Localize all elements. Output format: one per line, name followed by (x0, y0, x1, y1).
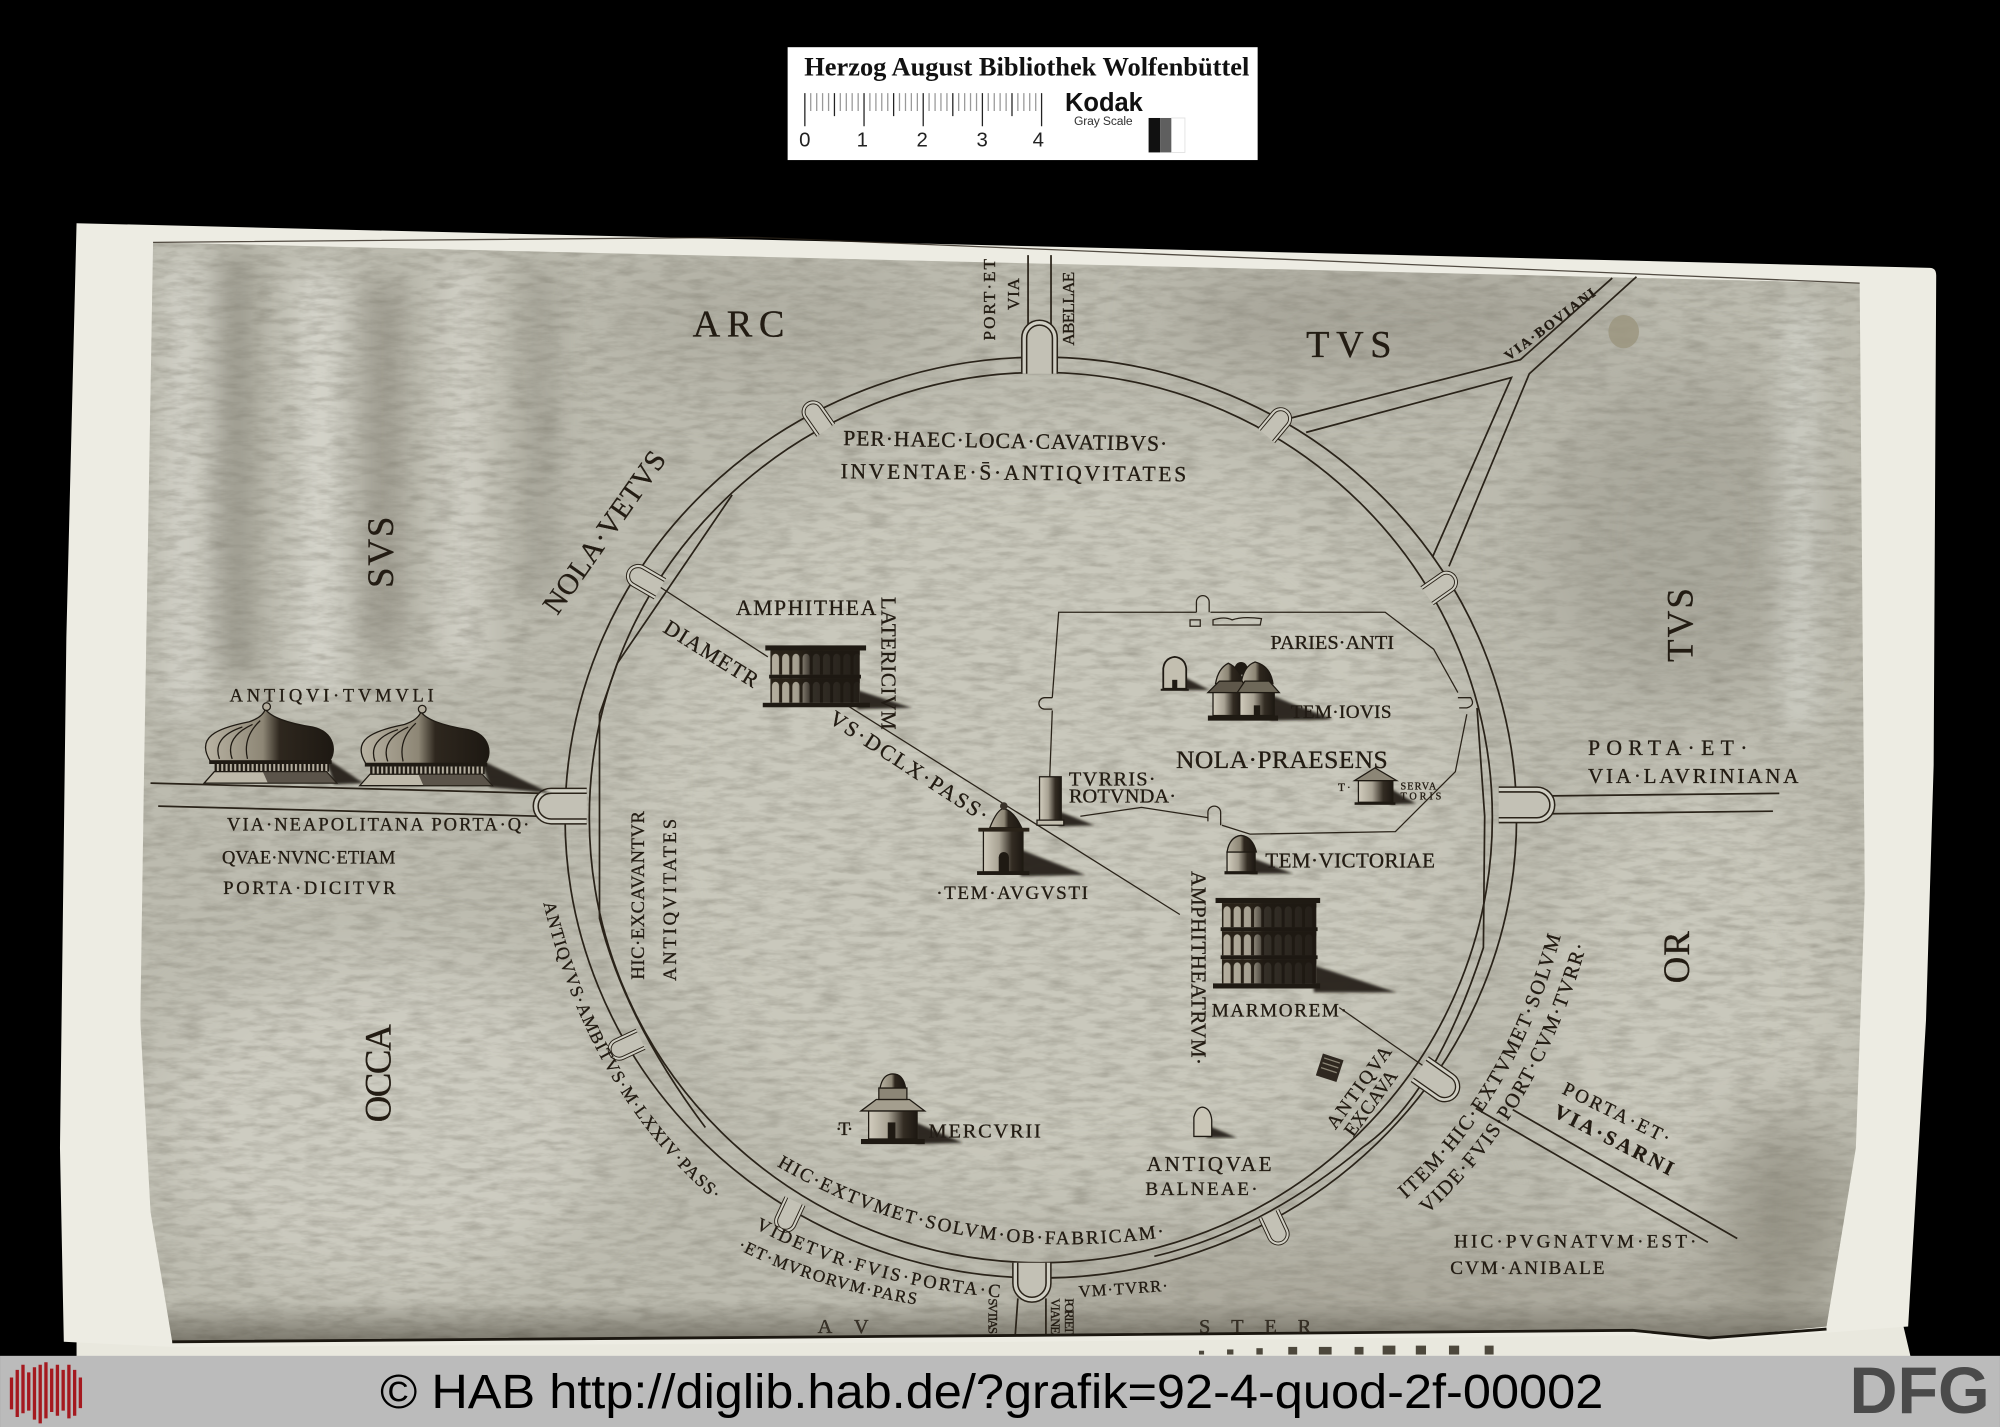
label: t mercurii (835, 1119, 1041, 1143)
label: amphithea: AMPHITHEA (736, 596, 877, 620)
label: turris rotunda (1069, 769, 1176, 807)
label: bottom road words: SVTIAS (986, 1298, 1000, 1334)
footer bar (0, 1354, 2000, 1427)
show-through text marks on lower page (1199, 1346, 1494, 1355)
label: antiqua excava: ANTIQVA (1323, 1042, 1397, 1133)
turris rotunda tower (1037, 777, 1094, 827)
label: hic pugnatum (1450, 1231, 1696, 1279)
label: antiquae balneae (1145, 1152, 1272, 1200)
label: tem victoriae: TEM·VICTORIAE (1265, 848, 1435, 872)
gate east (1499, 790, 1552, 820)
label: t serapis (1338, 782, 1442, 803)
curved label: item hic extumet: ITEM·HIC·EXTVMET·SOLVM (1397, 932, 1561, 1199)
compass word SVS: SVS (360, 517, 401, 588)
label: amphitheatrum: AMPHITHEATRVM· (1186, 871, 1210, 1065)
inner left wall line (600, 495, 732, 1128)
lower page of the open book (77, 1314, 1911, 1357)
tumulus 1 (204, 703, 364, 784)
compass word TVS east: TVS (1660, 588, 1701, 662)
via boviani and branch roads (1290, 277, 1636, 566)
plate tonal variation (128, 230, 1888, 1352)
label: nola vetus: NOLA·VETVS (537, 445, 673, 620)
label: diametrus part 1: DIAMETR (659, 615, 763, 693)
label: antiquae balneae: ANTIQVAE (1147, 1152, 1272, 1176)
inscription: per haec loca: INVENTAE·S̄·ANTIQVITATES (841, 459, 1186, 486)
label: porta et via laurinina (1588, 736, 1799, 788)
label: hic pugnatum: CVM·ANIBALE (1450, 1258, 1605, 1279)
compass word AV: AV (818, 1316, 869, 1338)
paries antiqua wall remnant (1190, 618, 1261, 626)
label: nola praesens: NOLA·PRAESENS (1176, 745, 1388, 774)
vertical streaks upper left (163, 255, 1814, 727)
label: bottom road words: VIANE (1048, 1298, 1062, 1334)
gate northeast small (1259, 405, 1294, 442)
label: t mercurii: MERCVRII (929, 1121, 1041, 1143)
label: port et via: PORT·ET (980, 258, 999, 341)
amphitheatre marmoreum (1213, 898, 1397, 992)
label: antiquae balneae: BALNEAE· (1145, 1179, 1258, 1200)
footer logo: red bars (12, 1362, 80, 1423)
inner right wall line (1154, 708, 1485, 1256)
temple of mercury (861, 1074, 963, 1144)
label: vm turr: VM·TVRR· (1078, 1276, 1168, 1301)
label: antiqui tumuli: ANTIQVI·TVMVLI (230, 686, 434, 706)
label: antiqua excava: EXCAVA (1340, 1066, 1402, 1141)
roads (151, 255, 1779, 1334)
label: turris rotunda: ROTVNDA· (1069, 785, 1176, 807)
ruler numbers (799, 130, 1044, 152)
label: paries anti: PARIES·ANTI (1270, 632, 1394, 654)
strip background (788, 47, 1258, 160)
label: antiquitates: ANTIQVITATES (660, 819, 680, 981)
inscription: per haec loca: PER·HAEC·LOCA·CAVATIBVS· (843, 426, 1167, 456)
label: porta et via sarni: PORTA·ET· (1559, 1079, 1674, 1149)
gates in city wall (536, 323, 1552, 1300)
curved label: et murorum pars: ·ET·MVRORVM·PARS (741, 1242, 916, 1304)
stain spot (1608, 315, 1639, 348)
via neapolitana road (151, 783, 542, 816)
via laurininiana road (1551, 793, 1779, 814)
label: bottom road words (986, 1298, 1076, 1334)
ruler numbers: 0 (799, 130, 811, 152)
temple of jupiter cluster (1208, 662, 1333, 721)
nola praesens modern town outline (1039, 596, 1473, 834)
label: bottom road words: PORTET (1062, 1298, 1076, 1334)
label: port et via: VIA (1004, 277, 1023, 310)
kodak text: Kodak (1065, 89, 1144, 117)
compass word OR: OR (1656, 931, 1697, 983)
via sarni road (1476, 1108, 1737, 1242)
engraved map plate (128, 230, 1888, 1352)
library colour strip (788, 47, 1258, 160)
tumulus 2 (360, 705, 551, 793)
gray scale swatches (1149, 118, 1185, 152)
label: tem iovis: TEM·IOVIS (1291, 702, 1392, 723)
library name: Herzog August Bibliothek Wolfenbüttel (804, 51, 1249, 81)
label: hic excavantur: HIC·EXCAVANTVR (628, 811, 648, 980)
compass word OCCA: OCCA (357, 1024, 398, 1122)
compass word ARC: ARC (693, 304, 784, 346)
temple of serapis (1355, 768, 1416, 805)
footer DFG logo: DFG (1849, 1354, 1990, 1427)
gate south east (1260, 1210, 1291, 1247)
gate upper right (1422, 569, 1460, 604)
plate top border line (153, 237, 1860, 283)
label: porta et via sarni: VIA·SARNI (1550, 1101, 1677, 1180)
gate south west (773, 1197, 804, 1234)
label: diametrus part 2: VS·DCLX·PASS· (825, 706, 993, 827)
curved label: videtur: VIDETVR·FVIS·PORTA·C (760, 1217, 1000, 1298)
gate northwest small (800, 399, 834, 435)
temple of victoria (1224, 835, 1293, 874)
ruler numbers: 3 (976, 130, 988, 152)
label: port et via (980, 258, 1023, 341)
gate south (1015, 1263, 1048, 1300)
label: t mercurii: ·T· (835, 1119, 853, 1140)
curved label: hic extumet: HIC·EXTVMET·SOLVM·OB·FABRICAM· (777, 1155, 1162, 1244)
small shrine near jupiter (1161, 657, 1209, 691)
curved label: antiquus ambitus: ANTIQVVS·AMBITVS·M·LXXIV·PASS· (543, 903, 718, 1196)
ruler numbers: 4 (1033, 130, 1044, 152)
temple of augustus (977, 802, 1085, 876)
ruler numbers: 1 (857, 130, 868, 152)
label: hic pugnatum: HIC·PVGNATVM·EST· (1454, 1231, 1696, 1252)
label: tem augusti: ·TEM·AVGVSTI (936, 883, 1088, 904)
gate sarni (1412, 1059, 1463, 1105)
curved label: vide fuis: VIDE·FVIS·PORT·CVM·TVRR· (1418, 945, 1584, 1210)
diameter line (634, 570, 1435, 1074)
label: t serapis: T· (1338, 782, 1351, 794)
inscription: per haec loca (841, 426, 1186, 486)
balneae small shrine (1194, 1107, 1237, 1138)
gate west (536, 791, 587, 821)
city wall: double ring (565, 357, 1517, 1278)
label: latericium: LATERICIVM (876, 597, 900, 730)
antique excavation block (1316, 1054, 1344, 1082)
label: via neapolitana: PORTA·DICITVR (223, 878, 396, 898)
ruler numbers: 2 (917, 130, 928, 152)
plate bottom fold shadow line (172, 1329, 1827, 1342)
label: t serapis: SERVA (1400, 782, 1437, 793)
compass word TVS north: TVS (1306, 324, 1392, 366)
label: via neapolitana: QVAE·NVNC·ETIAM (222, 847, 395, 867)
gate lower left (607, 1031, 645, 1062)
label: abellae: ABELLAE (1059, 272, 1078, 346)
ruler (805, 93, 1042, 126)
top road (1028, 255, 1051, 334)
compass word STER: STER (1199, 1316, 1312, 1338)
small towers on outline (1039, 596, 1473, 825)
label: porta et via laurinina: PORTA·ET· (1588, 736, 1747, 760)
paper sheet margin (60, 223, 1936, 1347)
bottom road (1015, 1298, 1046, 1334)
label: via neapolitana: VIA·NEAPOLITANA PORTA·Q· (227, 814, 529, 834)
label: via boviani: VIA·BOVIANI (1502, 285, 1599, 364)
footer url text: © HAB http://diglib.hab.de/?grafik=92-4-quod-2f-00002 (380, 1365, 1603, 1419)
label: porta et via laurinina: VIA·LAVRINIANA (1588, 764, 1799, 788)
gray scale text: Gray Scale (1074, 114, 1133, 128)
gate north (1024, 323, 1055, 374)
label: via neapolitana (222, 814, 529, 898)
label: t serapis: TORIS (1400, 792, 1442, 803)
label: turris rotunda: TVRRIS· (1069, 769, 1156, 791)
gate nola vetus (624, 562, 665, 598)
label: marmoreum: MARMOREM· (1212, 1001, 1347, 1022)
amphitheatre latericium (763, 645, 912, 709)
